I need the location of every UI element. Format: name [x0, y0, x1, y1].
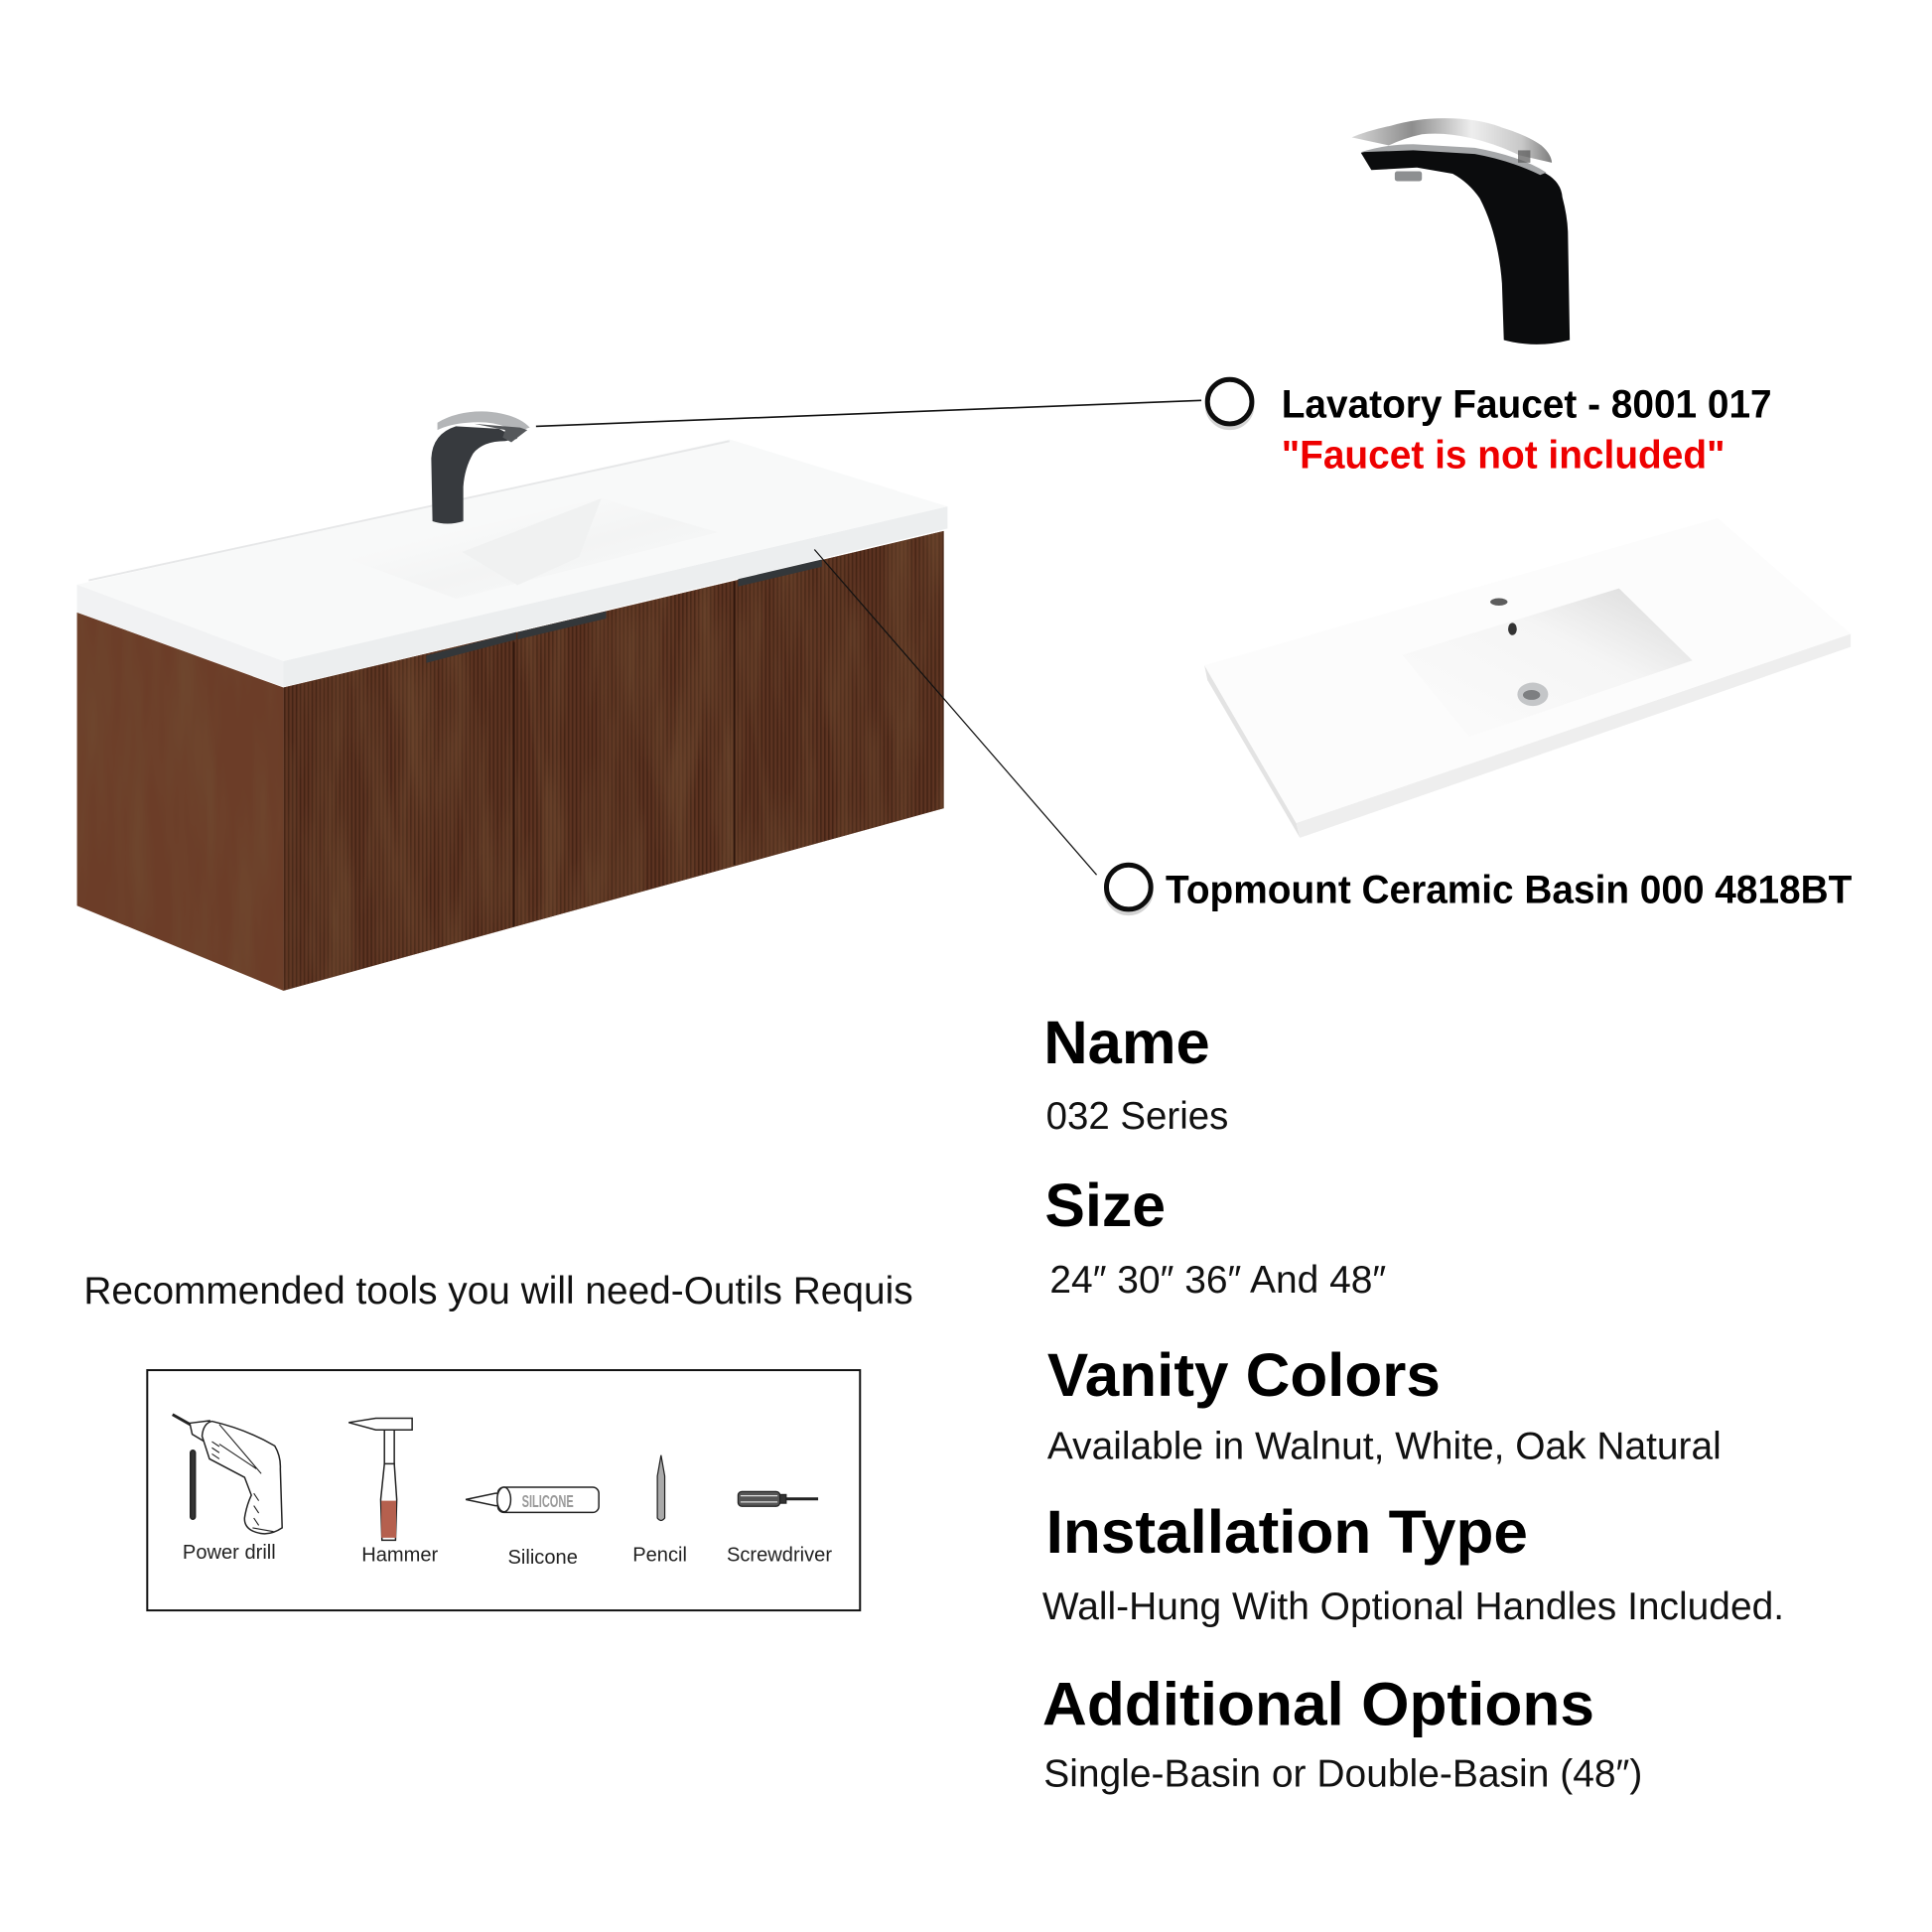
tool labels	[183, 1542, 832, 1569]
icon: screwdriver	[738, 1491, 818, 1506]
marker circle	[1106, 865, 1151, 913]
spec: name: Name	[1043, 1009, 1210, 1077]
cabinet fluted front doors	[283, 530, 944, 993]
tool labels: Silicone	[508, 1547, 578, 1569]
spec: vanity colors	[1047, 1341, 1722, 1467]
tube label: SILICONE	[522, 1491, 574, 1511]
product image: ceramic basin	[1204, 518, 1851, 838]
basin bowl	[1402, 589, 1693, 737]
spec: size: 24″ 30″ 36″ And 48″	[1049, 1259, 1386, 1302]
faucet label: Lavatory Faucet - 8001 017	[1282, 383, 1772, 427]
callout: lavatory faucet	[1207, 379, 1772, 478]
panel: recommended tools	[147, 1370, 860, 1610]
tool labels: Pencil	[632, 1544, 687, 1566]
callout: ceramic basin	[1106, 865, 1852, 913]
tools heading: Recommended tools you will need-Outils Requis	[83, 1270, 913, 1312]
spec: vanity colors: Vanity Colors	[1047, 1341, 1441, 1410]
tool labels: Hammer	[361, 1544, 439, 1566]
icon: pencil	[657, 1455, 665, 1520]
spec: name: 032 Series	[1046, 1095, 1228, 1138]
cabinet side panel	[73, 610, 286, 995]
tool labels: Screwdriver	[727, 1544, 832, 1566]
spec: size: Size	[1044, 1172, 1166, 1240]
spec: additional options: Additional Options	[1042, 1671, 1594, 1739]
basin label: Topmount Ceramic Basin 000 4818BT	[1166, 869, 1852, 912]
spec: name	[1043, 1009, 1228, 1138]
not included note: "Faucet is not included"	[1282, 434, 1725, 478]
tool labels: Power drill	[183, 1542, 276, 1564]
spec: installation type: Wall-Hung With Optional Handles Included.	[1042, 1586, 1784, 1628]
icon: hammer	[348, 1418, 412, 1540]
spec: size	[1044, 1172, 1386, 1302]
marker circle	[1207, 379, 1252, 428]
countertop	[77, 439, 947, 687]
sink bowl	[342, 498, 718, 599]
spec: additional options	[1042, 1670, 1642, 1796]
leader line: basin	[814, 550, 1097, 875]
small faucet on vanity	[431, 411, 530, 523]
spec: vanity colors: Available in Walnut, White, Oak Natural	[1047, 1425, 1722, 1467]
spec: additional options: Single-Basin or Double-Basin (48″)	[1043, 1753, 1642, 1796]
vanity cabinet with countertop	[73, 439, 947, 995]
icon: silicone tube	[466, 1487, 599, 1512]
door handles	[426, 559, 822, 663]
spec: installation type	[1042, 1498, 1784, 1628]
icon: power drill	[173, 1415, 282, 1534]
product image: lavatory faucet	[1351, 118, 1570, 345]
spec: installation type: Installation Type	[1046, 1498, 1528, 1567]
leader line: faucet	[536, 400, 1201, 426]
